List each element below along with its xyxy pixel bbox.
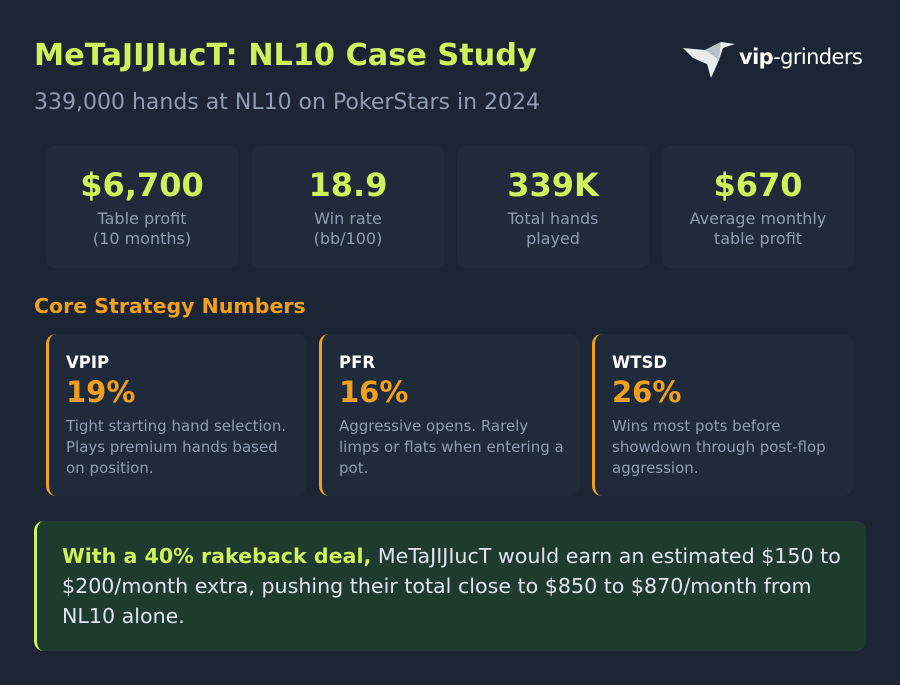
logo: vip-grinders: [683, 42, 862, 78]
card: WTSD: Wins most pots before showdown through post-flop aggression.: [612, 417, 826, 477]
logo: vip-grinders: vip-grinders: [739, 45, 862, 69]
card: VPIP: VPIP: [66, 353, 109, 372]
card: WTSD: 26%: [612, 375, 681, 409]
stat: total hands: Total hands: [507, 209, 599, 228]
callout: rakeback: With a 40% rakeback deal, MeTaJIJIucT would earn an estimated $150 to $200/month extra, pushing their total close to $850 to $870/month from NL10 alone.: [62, 544, 841, 628]
card: WTSD: [592, 334, 853, 496]
stat: table profit: [46, 146, 238, 268]
stat: monthly profit: table profit: [714, 229, 802, 248]
card: VPIP: [46, 334, 307, 496]
stat: win rate: [252, 146, 444, 268]
subtitle: 339,000 hands at NL10 on PokerStars in 2024: [34, 90, 540, 115]
stat: table profit: $6,700: [80, 166, 204, 204]
stat: win rate: Win rate: [314, 209, 382, 228]
card: PFR: [319, 334, 580, 496]
card: VPIP: Tight starting hand selection. Plays premium hands based on position.: [66, 417, 286, 477]
card: WTSD: WTSD: [612, 353, 667, 372]
card: PFR: PFR: [339, 353, 375, 372]
stat: total hands: [457, 146, 649, 268]
stat: win rate: (bb/100): [314, 229, 382, 248]
card: PFR: 16%: [339, 375, 408, 409]
stat: table profit: (10 months): [93, 229, 191, 248]
title: MeTaJIJIucT: NL10 Case Study: [34, 38, 537, 73]
card: VPIP: 19%: [66, 375, 135, 409]
stat: monthly profit: Average monthly: [690, 209, 826, 228]
stat: win rate: 18.9: [309, 166, 387, 204]
stat: total hands: played: [526, 229, 580, 248]
section heading: Core Strategy Numbers: [34, 294, 306, 318]
card: PFR: Aggressive opens. Rarely limps or flats when entering a pot.: [339, 417, 564, 477]
stat: table profit: Table profit: [98, 209, 186, 228]
callout: rakeback: [34, 521, 866, 651]
stat: monthly profit: $670: [713, 166, 803, 204]
stat: monthly profit: [662, 146, 854, 268]
stat: total hands: 339K: [507, 166, 599, 204]
